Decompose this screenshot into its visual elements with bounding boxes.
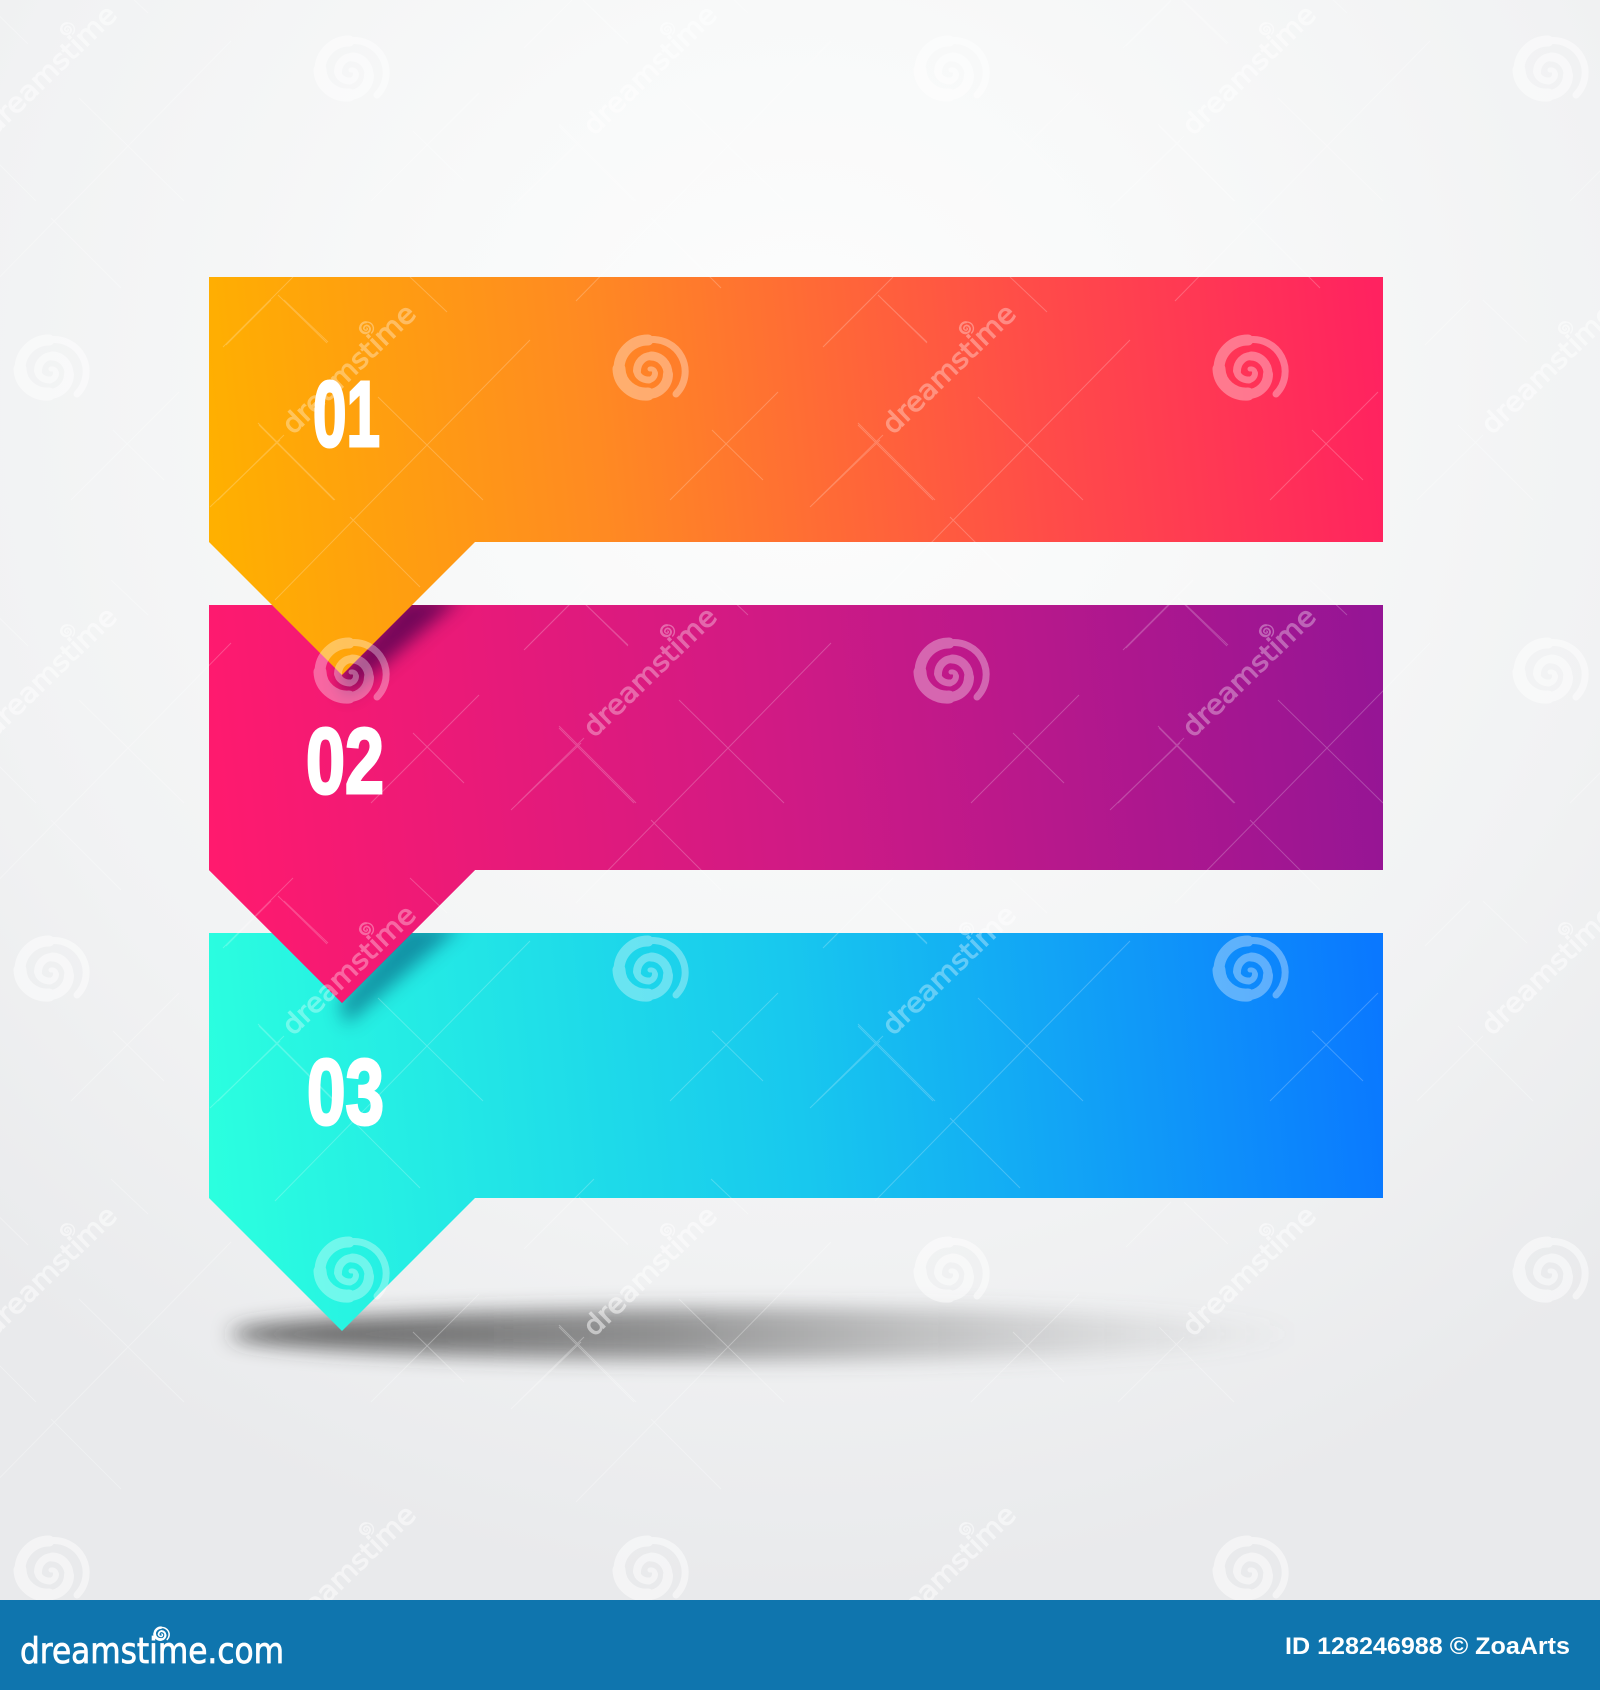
banner 01 (209, 277, 1383, 675)
number 01: 01 (313, 362, 380, 466)
shadow of arrow 01 on banner 02 (340, 597, 462, 697)
dreamstime watermark overlay on banners (209, 277, 1383, 1303)
shadow of arrow 02 on banner 03 (340, 925, 462, 1025)
footer image id and credit: ID 128246988 © ZoaArts (1285, 1633, 1570, 1660)
number 03: 03 (307, 1040, 384, 1144)
banner 02 arrow shape (209, 605, 1383, 1003)
footer bar (0, 1600, 1600, 1690)
banner 03 (209, 933, 1383, 1331)
number 02: 02 (306, 709, 384, 813)
banner 02 (209, 605, 1383, 1003)
redraw of arrow 02 tip above its shadow (209, 870, 475, 1003)
footer logo: dreamstime.com: dreamstime.com (20, 1631, 284, 1672)
banner 03 arrow shape (209, 933, 1383, 1331)
banner 01 arrow shape (209, 277, 1383, 675)
ground shadow (230, 1308, 1300, 1360)
